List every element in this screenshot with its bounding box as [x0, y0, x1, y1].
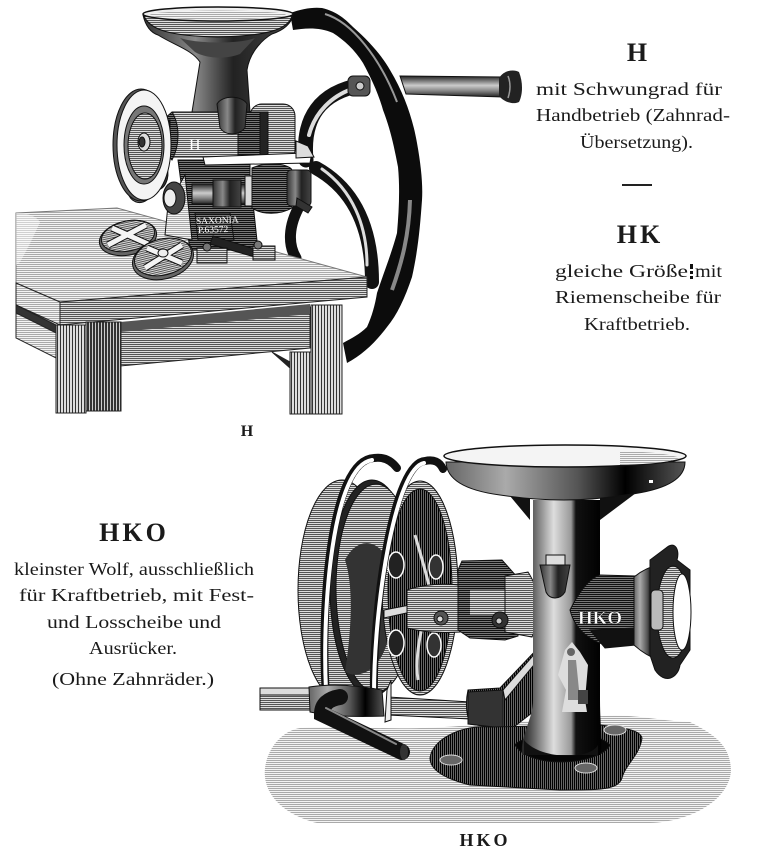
ground shadow: [265, 716, 731, 823]
trademark saint figure: [558, 642, 588, 712]
illustration: H grinder on table: [16, 7, 522, 414]
illustration: HKO grinder: [260, 445, 731, 823]
text block: HK description: gleiche Größe: [555, 261, 688, 281]
text block: HK description: [555, 261, 722, 334]
text block: H description: mit Schwungrad für: [536, 79, 722, 99]
gear box: [250, 104, 295, 162]
table: [16, 208, 367, 414]
text block: HK description: Riemenscheibe für: [555, 287, 721, 307]
oil cup: [540, 555, 570, 598]
crank lever: [322, 697, 408, 760]
text block: H description: [536, 79, 730, 153]
stand with SAXONIA plate: SAXONIA: [196, 216, 239, 227]
caption: HKO: HKO: [459, 830, 511, 850]
arm and head: [570, 545, 691, 678]
flywheel rim: [290, 8, 422, 363]
shaft hub and collars: [407, 560, 538, 640]
stand with SAXONIA plate: [165, 160, 275, 263]
text block: HKO description: für Kraftbetrieb, mit Fest-: [19, 585, 254, 605]
support bar: [203, 141, 314, 165]
text block: HK description: Kraftbetrieb.: [584, 314, 690, 334]
pan hopper: [444, 445, 686, 500]
caption: H: H: [241, 423, 254, 440]
grinder column: [505, 490, 640, 756]
shifter bracket: [466, 648, 542, 730]
text block: H description: Handbetrieb (Zahnrad-: [536, 105, 730, 126]
fast and loose pulleys: [298, 480, 458, 700]
feed ring with wing nuts: [113, 89, 171, 203]
text block: HKO description: kleinster Wolf, ausschließlich: [14, 559, 254, 579]
cutter discs: [96, 215, 198, 286]
text block: HKO description: [14, 559, 254, 690]
grinder body: H: [189, 137, 201, 154]
shifter bar: [260, 680, 470, 722]
divider dash: [622, 184, 652, 186]
hopper: [143, 7, 293, 112]
text block: HKO description: Ausrücker.: [89, 638, 177, 658]
arm and head: HKO: [578, 608, 622, 629]
flywheel spokes: [290, 76, 372, 282]
heading: HK: HK: [617, 220, 663, 249]
drive shaft and hub: [163, 164, 312, 214]
belt shifter forks: [324, 458, 443, 700]
text block: HKO description: und Losscheibe und: [47, 612, 221, 632]
grinder body: [163, 97, 260, 160]
text block: HKO description: (Ohne Zahnräder.): [52, 669, 214, 690]
base plate: [430, 725, 642, 790]
heading: HKO: HKO: [99, 518, 169, 547]
text block: H description: Übersetzung).: [580, 132, 693, 153]
heading: H: H: [627, 38, 647, 67]
crank handle: [400, 70, 522, 103]
stand with SAXONIA plate: P.63572: [198, 225, 229, 236]
text block: HK description: mit: [695, 261, 722, 281]
